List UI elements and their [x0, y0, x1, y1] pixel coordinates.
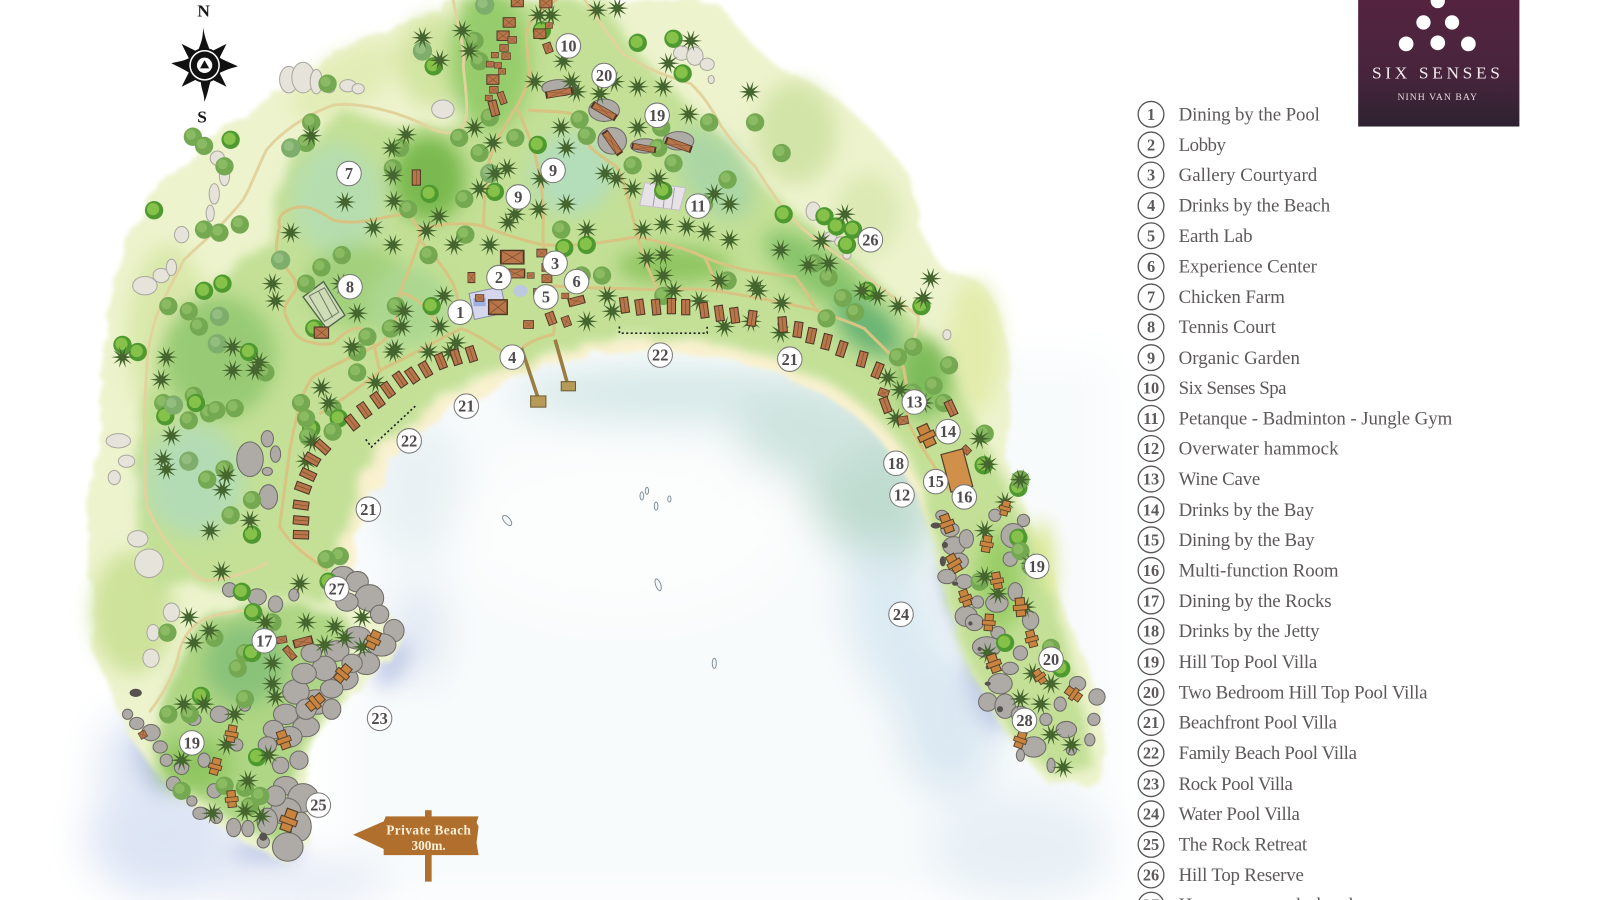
legend: 15 — [1143, 530, 1159, 549]
jetties — [521, 340, 576, 407]
villas south headland — [138, 628, 384, 834]
legend: 5 — [1147, 226, 1155, 245]
map markers: 2 — [495, 268, 503, 287]
signpost: private beach: Private Beach — [386, 823, 472, 838]
legend: Dining by the Pool — [1179, 104, 1320, 125]
legend: 1 — [1147, 105, 1155, 124]
legend: 16 — [1143, 561, 1159, 580]
land: pale yellow-green washes — [92, 15, 1055, 673]
light boulders — [106, 46, 951, 667]
legend: Earth Lab — [1179, 226, 1253, 247]
boats in bay — [501, 487, 716, 668]
land: pale outer forest — [88, 0, 1103, 862]
legend: 6 — [1147, 257, 1155, 276]
logo wordmark: SIX SENSES — [1372, 64, 1504, 83]
legend: 25 — [1143, 835, 1159, 854]
map markers: 19 — [184, 733, 200, 752]
compass rose — [171, 1, 238, 126]
land: southern headland green — [153, 606, 352, 847]
legend: 26 — [1143, 866, 1159, 885]
map markers: 14 — [940, 422, 956, 441]
map markers: 26 — [862, 230, 879, 249]
legend: Lobby — [1179, 135, 1226, 156]
map markers: 20 — [1043, 650, 1059, 669]
dark sea rocks — [130, 522, 1003, 841]
map markers — [180, 34, 1063, 817]
legend: Dining by the Rocks — [1179, 591, 1332, 612]
legend: Hill Top Reserve — [1179, 865, 1304, 886]
map markers: 25 — [310, 796, 327, 815]
map markers: 21 — [360, 500, 377, 519]
logo panel — [1358, 0, 1519, 127]
legend: 22 — [1143, 744, 1159, 763]
map markers: 16 — [956, 488, 972, 507]
legend: Gallery Courtyard — [1179, 165, 1318, 186]
sand beach — [327, 326, 964, 577]
legend: 19 — [1143, 652, 1159, 671]
legend: Chicken Farm — [1179, 287, 1285, 308]
map markers: 21 — [782, 350, 798, 369]
tennis court — [303, 282, 345, 329]
land: deeper green washes — [145, 0, 1022, 792]
villas west beach — [293, 346, 478, 539]
map markers: 15 — [928, 472, 944, 491]
legend: 17 — [1143, 592, 1159, 611]
grey rocks — [122, 80, 1105, 861]
legend: 11 — [1143, 409, 1159, 428]
legend: 24 — [1143, 804, 1159, 823]
logo dots — [1399, 0, 1476, 51]
family villa dotted boundaries — [365, 327, 707, 447]
legend: Experience Center — [1179, 256, 1318, 277]
legend: Hill Top Pool Villa — [1179, 652, 1318, 673]
legend: Organic Garden — [1179, 348, 1300, 369]
central buildings — [314, 249, 585, 338]
map markers: 19 — [649, 106, 665, 125]
legend: 12 — [1143, 439, 1159, 458]
legend: Drinks by the Beach — [1179, 196, 1331, 217]
legend: Drinks by the Bay — [1179, 500, 1314, 521]
legend: 2 — [1147, 136, 1155, 155]
sea wash — [87, 357, 1112, 900]
rock shadow in water — [124, 554, 1014, 864]
map markers: 8 — [346, 277, 354, 296]
map markers: 7 — [345, 164, 353, 183]
legend: 18 — [1143, 622, 1159, 641]
signpost: private beach — [353, 810, 479, 882]
legend: 7 — [1147, 288, 1155, 307]
legend: Multi-function Room — [1179, 561, 1339, 582]
legend: 23 — [1143, 774, 1159, 793]
legend: 21 — [1143, 713, 1159, 732]
map markers: 1 — [456, 303, 464, 322]
legend: 14 — [1143, 500, 1159, 519]
map markers: 20 — [596, 66, 612, 85]
land: main green forest — [138, 0, 1092, 776]
legend: Family Beach Pool Villa — [1179, 743, 1358, 764]
legend: Wine Cave — [1179, 469, 1260, 490]
legend: 10 — [1143, 378, 1159, 397]
map markers: 27 — [329, 579, 345, 598]
legend: Tennis Court — [1179, 317, 1277, 338]
legend: Rock Pool Villa — [1179, 774, 1293, 795]
legend: Six Senses Spa — [1179, 378, 1287, 399]
map markers: 9 — [549, 161, 557, 180]
map markers: 23 — [371, 709, 388, 728]
legend: 20 — [1143, 683, 1159, 702]
compass star — [171, 28, 238, 102]
legend: 8 — [1147, 318, 1155, 337]
legend: Dining by the Bay — [1179, 530, 1315, 551]
map markers: 17 — [256, 631, 272, 650]
roads — [144, 0, 918, 711]
villas north hillside — [412, 0, 692, 185]
compass letter N: N — [197, 1, 210, 20]
legend: Drinks by the Jetty — [1179, 621, 1320, 642]
legend: Two Bedroom Hill Top Pool Villa — [1179, 682, 1428, 703]
villas east headland — [897, 398, 1084, 750]
petanque court — [640, 183, 686, 210]
map markers: 28 — [1016, 711, 1033, 730]
legend: 3 — [1147, 166, 1155, 185]
map markers: 22 — [401, 431, 417, 450]
logo location: NINH VAN BAY — [1398, 92, 1478, 103]
map markers: 18 — [888, 454, 904, 473]
legend: Water Pool Villa — [1179, 804, 1301, 825]
map markers: 22 — [652, 346, 668, 365]
map markers: 4 — [508, 348, 516, 367]
legend: The Rock Retreat — [1179, 835, 1308, 856]
compass letter S: S — [197, 107, 207, 126]
legend — [1138, 101, 1453, 900]
map markers: 9 — [514, 188, 522, 207]
signpost: private beach: 300m. — [411, 838, 446, 853]
legend: Beachfront Pool Villa — [1179, 713, 1338, 734]
map markers: 21 — [458, 397, 474, 416]
map markers: 11 — [690, 197, 706, 216]
map markers: 5 — [542, 288, 550, 307]
map markers: 24 — [893, 605, 909, 624]
map markers: 10 — [560, 37, 577, 56]
legend: 13 — [1143, 470, 1159, 489]
pool complex — [469, 285, 528, 319]
map markers: 6 — [572, 272, 581, 291]
palm trees — [111, 0, 1083, 827]
legend: 4 — [1147, 196, 1155, 215]
broadleaf trees — [113, 0, 1070, 815]
map markers: 19 — [1029, 557, 1045, 576]
map markers: 13 — [906, 393, 922, 412]
villas north beach — [619, 297, 958, 417]
map markers: 3 — [551, 254, 559, 273]
legend: Overwater hammock — [1179, 439, 1339, 460]
map markers: 12 — [894, 486, 910, 505]
legend: Petanque - Badminton - Jungle Gym — [1179, 408, 1453, 429]
legend: 9 — [1147, 348, 1155, 367]
